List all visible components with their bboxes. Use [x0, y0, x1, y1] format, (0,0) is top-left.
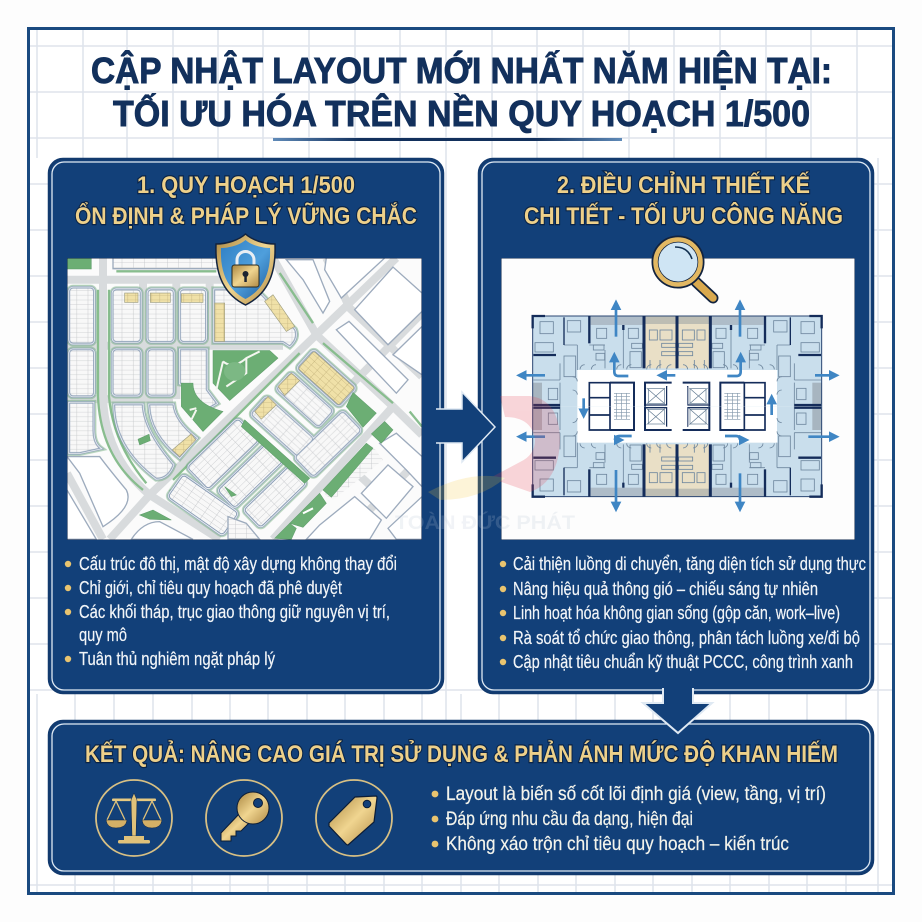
- icon: scales of justice: [96, 780, 172, 856]
- floor plan quadrants: [533, 316, 822, 497]
- bullet list: result: Layout là biến số cốt lõi định giá (view, tầng, vị trí): [446, 783, 826, 805]
- floor plan image: [501, 258, 855, 540]
- panel: quy hoach 1/500: [49, 159, 443, 693]
- bullet list: panel 1: Tuân thủ nghiêm ngặt pháp lý: [79, 649, 275, 669]
- bullet list: result: [432, 783, 826, 855]
- title: TỐI ƯU HÓA TRÊN NỀN QUY HOẠCH 1/500: [113, 92, 810, 134]
- bullet list: panel 1: [65, 554, 397, 669]
- icon: price tag: [316, 780, 392, 856]
- logo watermark: TOÀN ĐỨC PHÁT: [395, 512, 575, 534]
- arrow: panel 2 to result: [643, 688, 712, 733]
- arrow: panel 1 to panel 2: [436, 392, 495, 462]
- icon: shield with padlock: [216, 234, 275, 305]
- bullet list: panel 1: Chỉ giới, chỉ tiêu quy hoạch đã phê duyệt: [79, 578, 342, 598]
- panel: dieu chinh thiet ke: [479, 159, 873, 693]
- logo watermark: [395, 396, 575, 534]
- panel heading 1: 1. QUY HOẠCH 1/500: [137, 172, 355, 199]
- bullet list: panel 2: Cập nhật tiêu chuẩn kỹ thuật PCCC, công trình xanh: [513, 652, 853, 672]
- ventilation arrows: [526, 309, 830, 503]
- bullet list: panel 1: quy mô: [79, 625, 127, 645]
- panel heading 2: [524, 170, 843, 230]
- title underline: [273, 138, 622, 141]
- panel heading 1: ỔN ĐỊNH & PHÁP LÝ VỮNG CHẮC: [75, 202, 417, 230]
- panel heading 2: CHI TIẾT - TỐI ƯU CÔNG NĂNG: [524, 202, 843, 230]
- panel: ket qua: [49, 721, 873, 874]
- bullet list: result: Không xáo trộn chỉ tiêu quy hoạch – kiến trúc: [446, 833, 789, 855]
- title: [91, 49, 832, 134]
- bullet list: panel 2: Nâng hiệu quả thông gió – chiếu sáng tự nhiên: [513, 579, 818, 599]
- bullet list: panel 2: Linh hoạt hóa không gian sống (gộp căn, work–live): [513, 603, 840, 623]
- panel heading 1: [75, 172, 417, 230]
- icon: magnifying glass: [655, 239, 713, 298]
- bullet list: panel 1: Cấu trúc đô thị, mật độ xây dựng không thay đổi: [79, 554, 397, 574]
- panel heading 2: 2. ĐIỀU CHỈNH THIẾT KẾ: [557, 170, 810, 199]
- title: CẬP NHẬT LAYOUT MỚI NHẤT NĂM HIỆN TẠI:: [91, 49, 832, 91]
- bullet list: panel 1: Các khối tháp, trục giao thông giữ nguyên vị trí,: [79, 602, 390, 622]
- icon: key: [206, 780, 282, 856]
- bullet list: panel 2: [500, 554, 866, 672]
- site plan map: [67, 258, 422, 540]
- bullet list: result: Đáp ứng nhu cầu đa dạng, hiện đại: [446, 808, 693, 830]
